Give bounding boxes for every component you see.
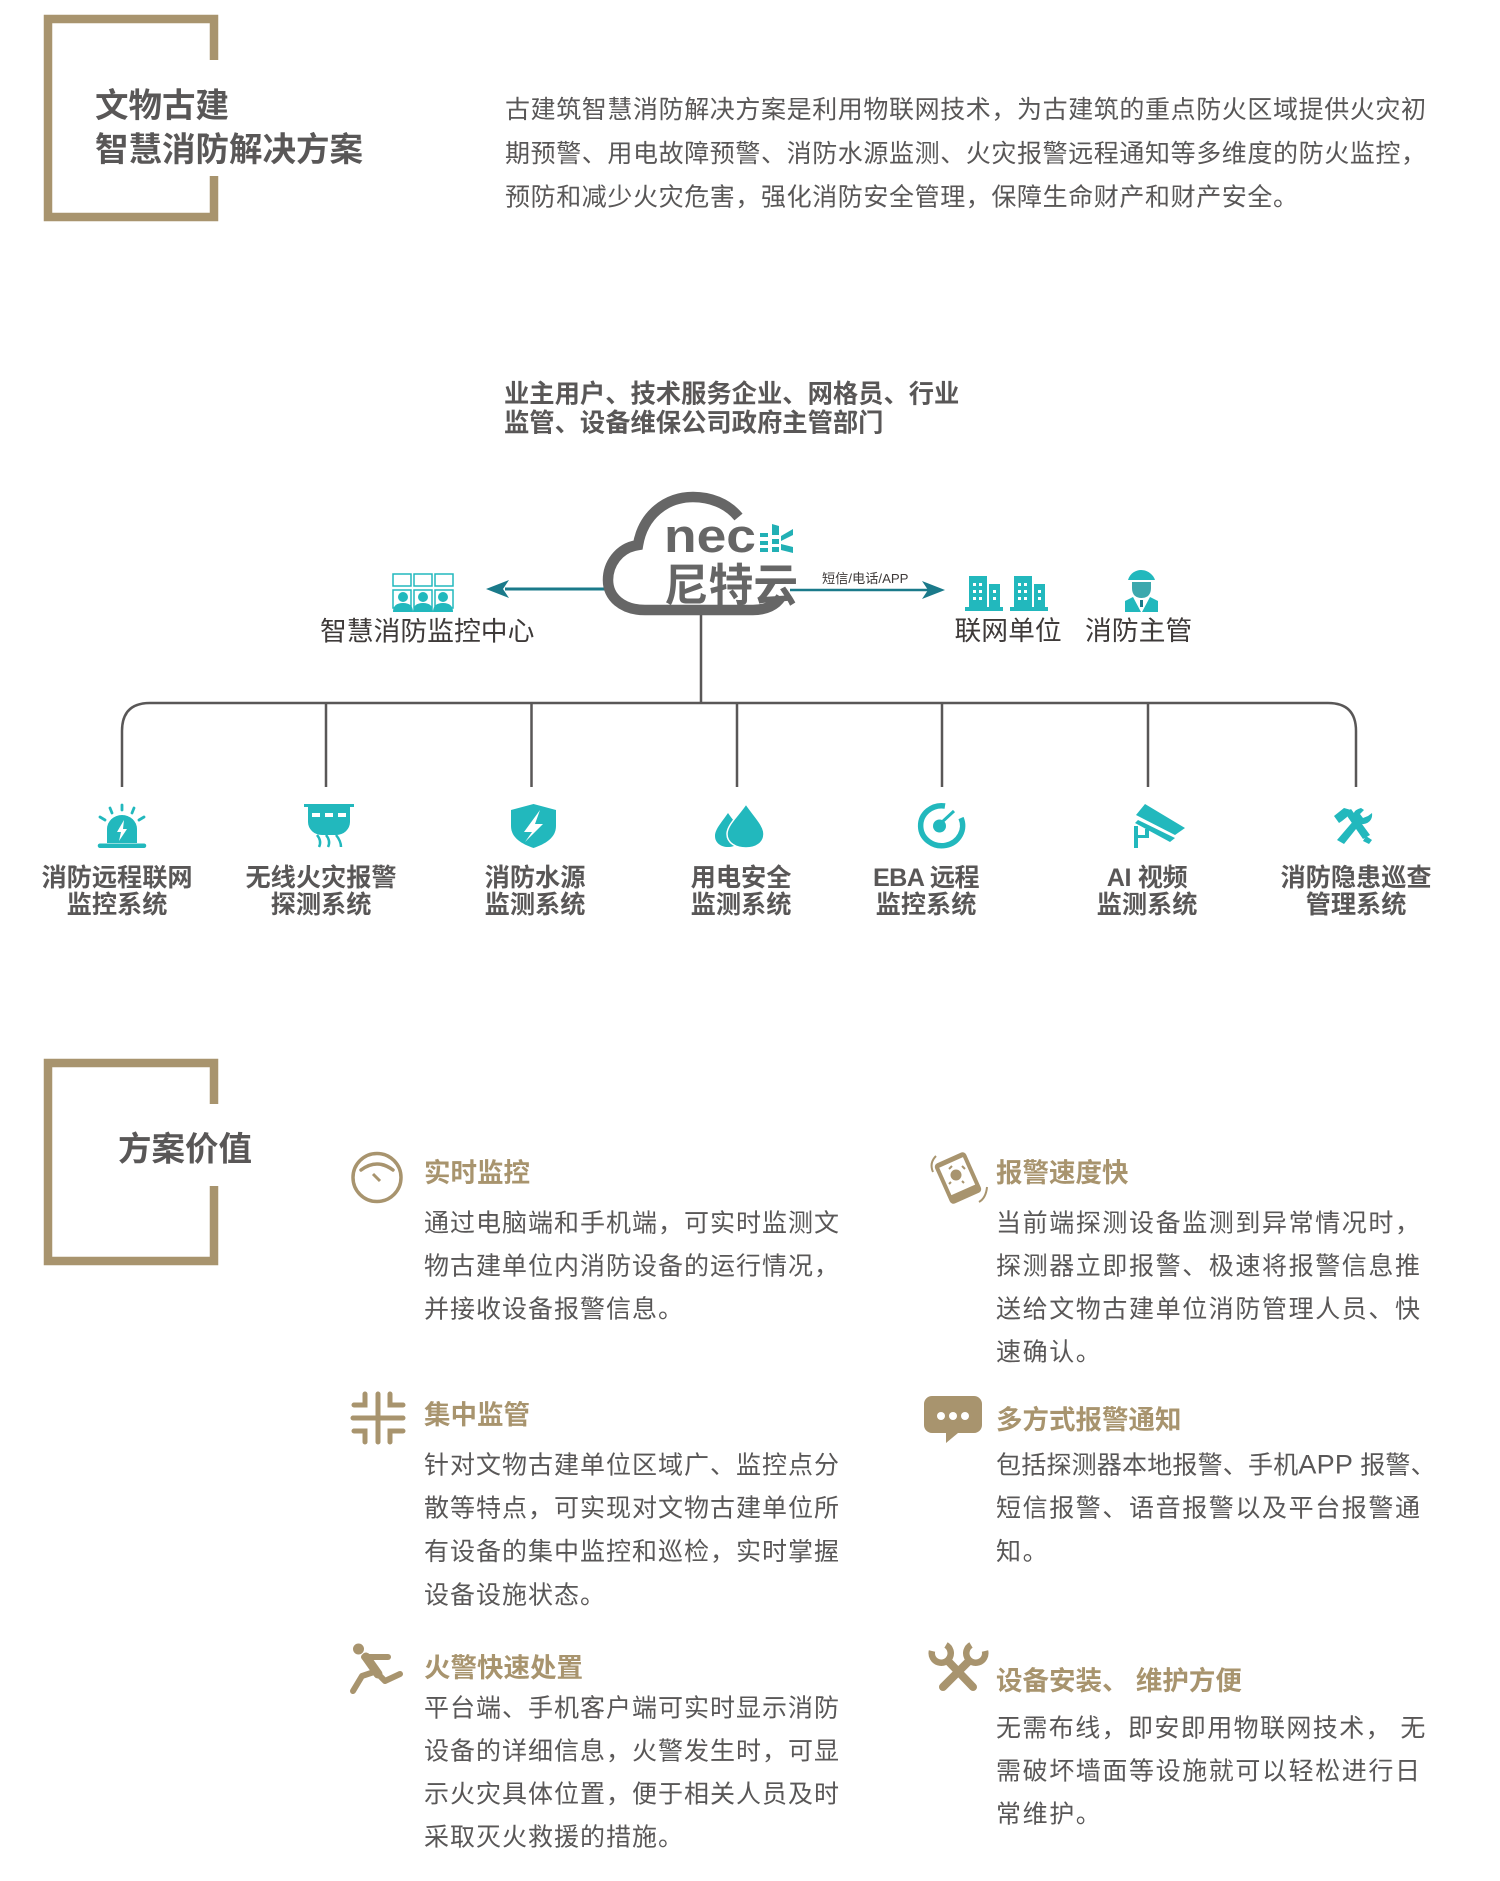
- label: system 7: [1280, 864, 1432, 919]
- intro paragraph: 预防和减少火灾危害，强化消防安全管理，保障生命财产和财产安全。: [505, 184, 1299, 212]
- item: centralized supervision: 集中监管: [424, 1400, 530, 1430]
- intro paragraph: [505, 96, 1427, 212]
- icon: water drops: [715, 804, 764, 848]
- item: easy maintenance: 需破坏墙面等设施就可以轻松进行日: [996, 1758, 1422, 1786]
- title: solution: 文物古建: [95, 88, 229, 125]
- item: real-time monitoring: 实时监控: [424, 1158, 530, 1188]
- label: system 7: 消防隐患巡查: [1280, 864, 1432, 892]
- intro paragraph: 古建筑智慧消防解决方案是利用物联网技术，为古建筑的重点防火区域提供火灾初: [505, 96, 1427, 124]
- heading frame: value: [48, 1063, 214, 1261]
- icon: detector: [304, 804, 354, 847]
- title: value: 方案价值: [118, 1132, 252, 1168]
- item: easy maintenance: [932, 1645, 1427, 1828]
- users text: 监管、设备维保公司政府主管部门: [504, 410, 883, 438]
- item: quick response: 设备的详细信息，火警发生时，可显: [424, 1738, 840, 1766]
- users text: 业主用户、技术服务企业、网格员、行业: [504, 380, 959, 408]
- item: quick response: [353, 1644, 840, 1852]
- icon: dial: [353, 1154, 401, 1202]
- users text: [504, 380, 959, 438]
- item: easy maintenance: 无需布线，即安即用物联网技术， 无: [996, 1714, 1427, 1742]
- item: fast alarm: 当前端探测设备监测到异常情况时，: [996, 1210, 1422, 1238]
- icon: connected units: [965, 576, 1048, 611]
- arrow label: 短信/电话/APP: [822, 571, 909, 586]
- label: system 3: [485, 864, 585, 919]
- item: easy maintenance: 常维护。: [996, 1800, 1102, 1828]
- label: system 6: AI 视频: [1107, 864, 1187, 892]
- intro paragraph: 期预警、用电故障预警、消防水源监测、火灾报警远程通知等多维度的防火监控，: [505, 140, 1427, 168]
- item: quick response: 采取灭火救援的措施。: [424, 1824, 684, 1852]
- label: system 4: 用电安全: [691, 864, 791, 892]
- item: multi-channel alerts: 包括探测器本地报警、手机APP 报警、: [996, 1450, 1436, 1480]
- item: fast alarm: 速确认。: [996, 1338, 1102, 1366]
- item: real-time monitoring: 物古建单位内消防设备的运行情况，: [424, 1252, 840, 1280]
- label: system 5: EBA 远程: [873, 864, 979, 892]
- item: centralized supervision: 针对文物古建单位区域广、监控点分: [424, 1452, 840, 1480]
- item: fast alarm: [932, 1151, 1422, 1366]
- label: system 6: 监测系统: [1097, 891, 1197, 919]
- item: centralized supervision: 设备设施状态。: [424, 1582, 606, 1610]
- label: system 1: [41, 864, 193, 919]
- label: system 4: 监测系统: [691, 891, 791, 919]
- item: real-time monitoring: 并接收设备报警信息。: [424, 1296, 684, 1324]
- label: system 6: [1097, 864, 1197, 919]
- item: quick response: 火警快速处置: [424, 1653, 583, 1683]
- icon: wrenches: [932, 1645, 985, 1687]
- icon: chat bubble: [924, 1396, 982, 1443]
- item: real-time monitoring: 通过电脑端和手机端，可实时监测文: [424, 1210, 840, 1238]
- title: solution: [95, 88, 363, 169]
- logo: cloud: nec: [664, 509, 756, 562]
- item: centralized supervision: 散等特点，可实现对文物古建单位所: [424, 1494, 840, 1522]
- item: multi-channel alerts: 短信报警、语音报警以及平台报警通: [996, 1494, 1422, 1522]
- item: multi-channel alerts: 多方式报警通知: [996, 1405, 1182, 1435]
- label: connected units: 联网单位: [954, 616, 1062, 646]
- item: quick response: 示火灾具体位置，便于相关人员及时: [424, 1780, 840, 1808]
- label: system 2: [245, 864, 397, 919]
- item: fast alarm: 报警速度快: [996, 1158, 1129, 1188]
- item: centralized supervision: [353, 1394, 840, 1610]
- item: centralized supervision: 有设备的集中监控和巡检，实时掌握: [424, 1538, 840, 1566]
- tree connectors: [122, 612, 1356, 787]
- label: system 1: 监控系统: [67, 891, 167, 919]
- icon: alarm: [98, 805, 146, 848]
- icon: gauge: [921, 806, 963, 846]
- logo: cloud: 尼特云: [664, 560, 798, 611]
- icon: phone: [932, 1151, 987, 1205]
- icon: tools: [1334, 808, 1372, 844]
- arrow: to connected units: [790, 581, 945, 599]
- label: system 2: 探测系统: [271, 891, 371, 919]
- label: monitoring center: 智慧消防监控中心: [320, 616, 534, 646]
- logo: cloud: [608, 497, 798, 611]
- icon: cross: [353, 1394, 403, 1442]
- label: system 1: 消防远程联网: [41, 864, 193, 892]
- item: real-time monitoring: [353, 1154, 840, 1324]
- icon: runner: [353, 1644, 400, 1691]
- item: fast alarm: 送给文物古建单位消防管理人员、快: [996, 1296, 1422, 1324]
- icon: monitoring center: [393, 574, 453, 612]
- icon: shield: [511, 804, 556, 848]
- arrow: to monitoring center: [486, 580, 606, 598]
- heading frame: solution: [48, 19, 214, 217]
- label: system 3: 监测系统: [485, 891, 585, 919]
- label: system 3: 消防水源: [485, 864, 585, 892]
- icon: fire officer: [1125, 570, 1158, 612]
- item: multi-channel alerts: 知。: [996, 1538, 1049, 1566]
- title: solution: 智慧消防解决方案: [95, 132, 363, 169]
- label: fire officer: 消防主管: [1085, 616, 1192, 646]
- label: system 7: 管理系统: [1306, 891, 1406, 919]
- item: quick response: 平台端、手机客户端可实时显示消防: [424, 1694, 840, 1722]
- item: multi-channel alerts: [924, 1396, 1436, 1566]
- label: system 2: 无线火灾报警: [245, 864, 397, 892]
- label: system 5: [873, 864, 979, 919]
- icon: camera: [1134, 804, 1185, 848]
- item: fast alarm: 探测器立即报警、极速将报警信息推: [996, 1252, 1422, 1280]
- item: easy maintenance: 设备安装、 维护方便: [996, 1666, 1242, 1696]
- label: system 4: [691, 864, 791, 919]
- label: system 5: 监控系统: [876, 891, 976, 919]
